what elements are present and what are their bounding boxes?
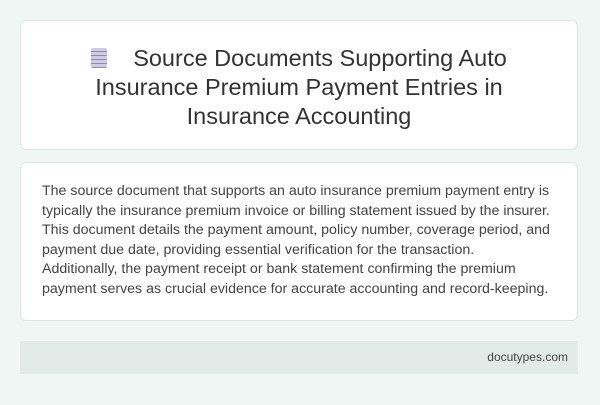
- panel: title: [20, 20, 578, 150]
- text block: Additionally, the payment receipt or bank statement confirming the premium payment serves as crucial evidence for accurate accounting and record-keeping.: [42, 261, 548, 296]
- footer text: docutypes.com: [487, 350, 568, 364]
- title: Source Documents Supporting Auto Insurance Premium Payment Entries in Insurance Accounting: [95, 45, 507, 129]
- text block: [42, 183, 550, 296]
- icon: document: [91, 48, 107, 68]
- panel: description: [20, 162, 578, 321]
- text block: The source document that supports an auto insurance premium payment entry is typically the insurance premium invoice or billing statement issued by the insurer. This document details the payment amount, policy number, coverage period, and payment due date, providing essential verification for the transaction.: [42, 183, 550, 258]
- footer: [20, 341, 578, 374]
